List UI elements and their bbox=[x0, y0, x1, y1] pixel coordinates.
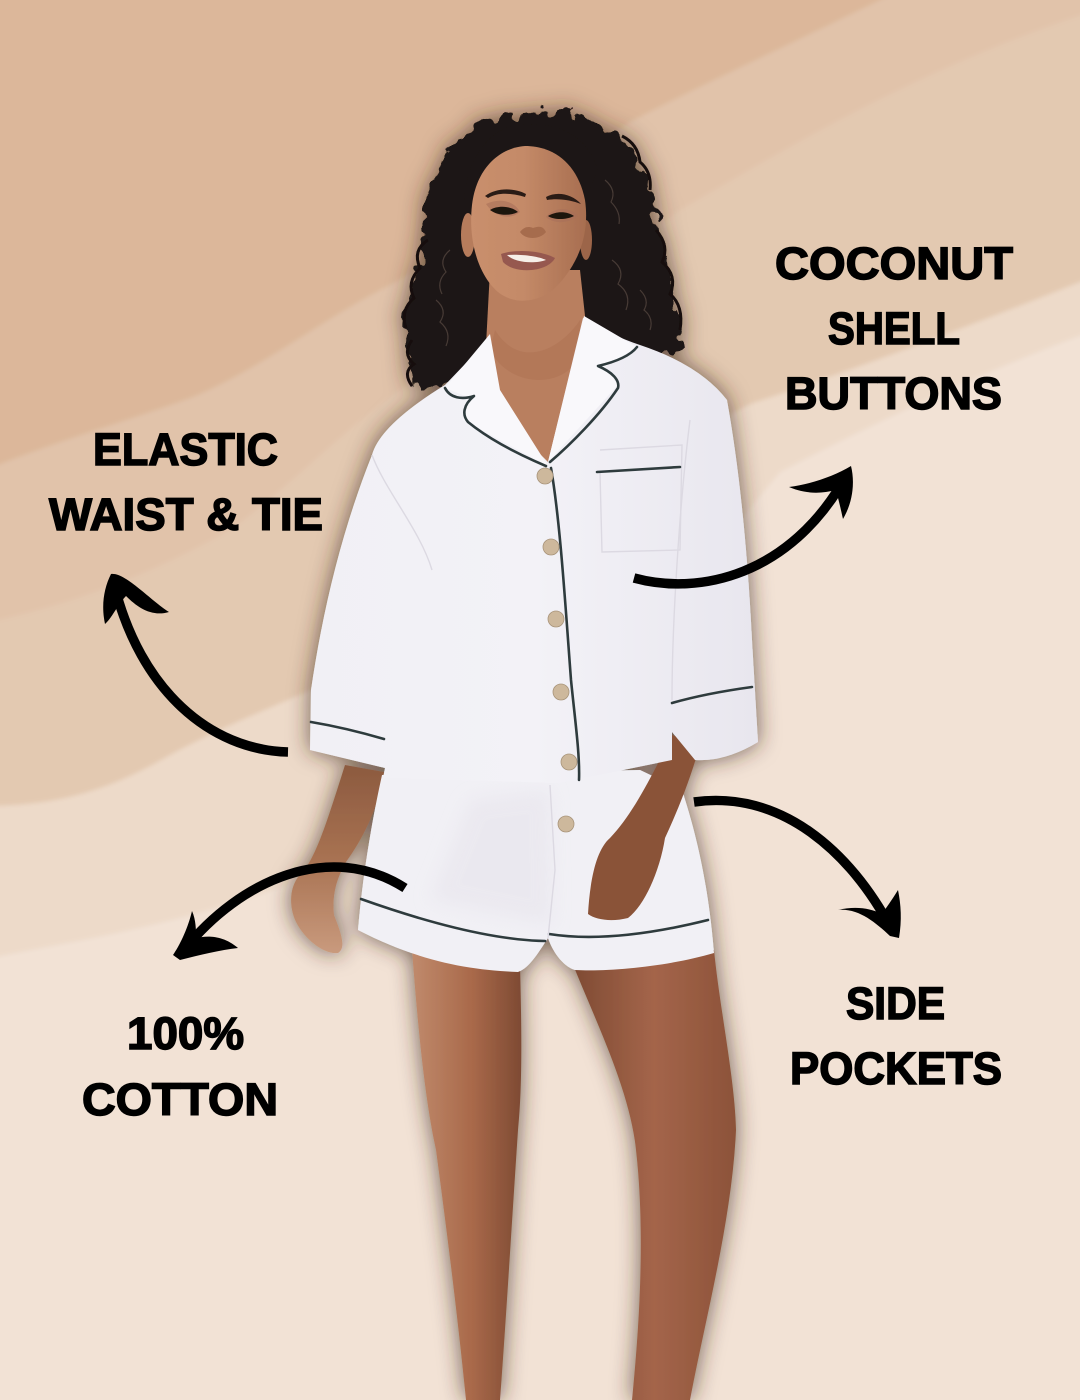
arrow: elastic waist and tie bbox=[103, 574, 288, 752]
lips and smile bbox=[501, 251, 555, 270]
eyes bbox=[486, 201, 578, 222]
left arm and hand bbox=[291, 765, 384, 953]
collar piping bbox=[445, 388, 546, 466]
shorts bbox=[358, 770, 714, 972]
arrow: side pockets bbox=[694, 800, 901, 938]
right leg bbox=[572, 950, 736, 1400]
pocket bbox=[600, 445, 682, 552]
right forearm and hand bbox=[588, 735, 700, 920]
cuff piping bbox=[311, 722, 384, 739]
label: 100% cotton bbox=[82, 1008, 278, 1125]
face bbox=[461, 146, 592, 301]
hair framing the forehead bbox=[464, 124, 598, 215]
waist button bbox=[558, 816, 574, 832]
left collar bbox=[445, 334, 548, 466]
label: 100% cotton: 100% bbox=[127, 1008, 244, 1059]
neck and chest bbox=[486, 270, 586, 462]
hair curls bbox=[404, 136, 681, 386]
right collar bbox=[548, 316, 637, 462]
arrow: coconut shell buttons bbox=[634, 466, 853, 584]
label: side pockets: POCKETS bbox=[790, 1043, 1002, 1094]
placket piping bbox=[551, 468, 579, 780]
arrow: 100% cotton bbox=[173, 867, 405, 960]
label: side pockets bbox=[790, 978, 1002, 1094]
label: coconut shell buttons: COCONUT bbox=[775, 238, 1013, 289]
photo: woman in white pajama set bbox=[291, 112, 758, 1400]
label: side pockets: SIDE bbox=[846, 978, 945, 1029]
left leg bbox=[412, 950, 521, 1400]
label: coconut shell buttons bbox=[775, 238, 1013, 419]
buttons bbox=[537, 468, 577, 770]
label: elastic waist and tie: ELASTIC bbox=[93, 424, 278, 475]
eyebrows bbox=[485, 189, 581, 204]
label: coconut shell buttons: BUTTONS bbox=[785, 368, 1002, 419]
nose bbox=[520, 227, 546, 238]
label: coconut shell buttons: SHELL bbox=[828, 303, 960, 354]
label: elastic waist and tie bbox=[49, 424, 323, 540]
label: elastic waist and tie: WAIST & TIE bbox=[49, 489, 323, 540]
hair back bbox=[404, 112, 684, 390]
label: 100% cotton: COTTON bbox=[82, 1074, 278, 1125]
shirt bbox=[310, 316, 758, 783]
